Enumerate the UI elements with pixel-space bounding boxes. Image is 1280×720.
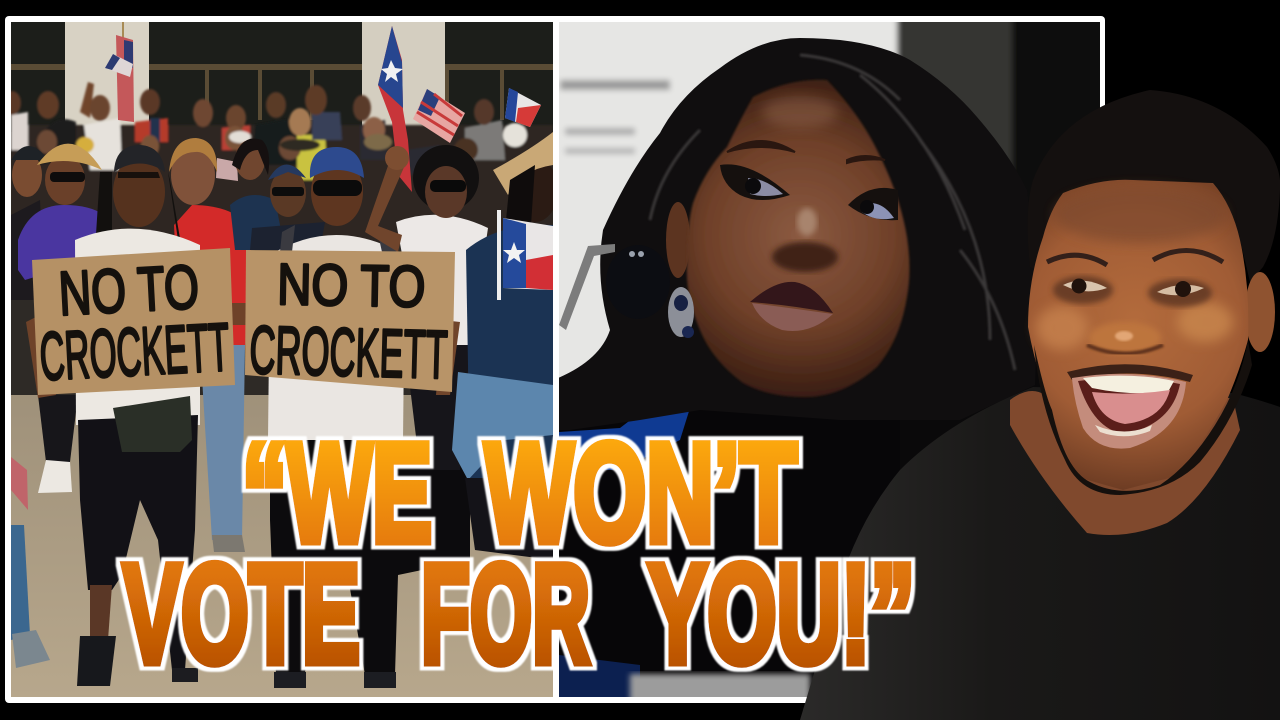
protest sign left: CROCKETT: [38, 309, 232, 395]
building facade: [11, 22, 553, 127]
ground: [11, 395, 553, 697]
dark shirt women: [230, 138, 325, 250]
left eye: [1063, 278, 1107, 294]
protest sign right: CROCKETT: [249, 312, 449, 393]
hair highlights: [650, 55, 1015, 370]
red shirt woman: [169, 138, 252, 552]
protest sign right: [245, 250, 455, 393]
arms holding signs: [26, 303, 460, 398]
title word: VOTE: VOTE: [123, 535, 360, 692]
man reacting: [800, 90, 1280, 720]
title word: WE with quote: “WE: [242, 414, 432, 571]
face: [1028, 180, 1248, 490]
lips: [750, 282, 833, 331]
woman with sunglasses centre: [268, 147, 470, 688]
hair: [1028, 90, 1280, 282]
protest sign left: [32, 248, 235, 395]
earring: [668, 287, 694, 338]
far left woman in hat: [11, 144, 106, 493]
woman with braids and cap: [75, 145, 200, 686]
far right woman in hat: [452, 132, 558, 560]
panel: protest photo: [3, 22, 558, 697]
title word: FOR: FOR: [421, 535, 590, 692]
back crowd: [11, 80, 553, 182]
left eye: [720, 164, 790, 200]
woman right with raised arm: [365, 145, 488, 470]
title word: WON'T: WON’T: [485, 414, 797, 571]
clothing: [559, 412, 814, 697]
black t-shirt: [800, 387, 1280, 720]
ear: [666, 202, 690, 278]
beard: [1034, 340, 1252, 495]
front Texas flag: [497, 210, 553, 300]
protest sign right: NO TO: [277, 252, 426, 320]
right eye: [848, 188, 898, 220]
forehead shade: [1055, 187, 1225, 243]
protesters: [11, 132, 558, 688]
protest sign left: NO TO: [57, 253, 201, 329]
nose: [772, 208, 838, 272]
eyebrows: [727, 141, 795, 152]
right eye: [1157, 281, 1204, 297]
hair: [558, 38, 1036, 430]
blurred backdrop: [559, 22, 1016, 378]
microphone: [559, 244, 644, 330]
forehead highlight: [762, 96, 838, 128]
bottom left legs: [11, 457, 50, 668]
face: [687, 80, 910, 397]
moustache: [1067, 364, 1193, 382]
neck: [1010, 391, 1240, 535]
nose: [1087, 322, 1163, 354]
mouth: [1072, 374, 1186, 449]
flags: [105, 22, 541, 192]
eye shadows: [1053, 276, 1113, 304]
panel: woman portrait: [550, 10, 1112, 704]
brows: [1047, 250, 1223, 265]
ear: [1245, 272, 1275, 352]
title: [123, 414, 915, 692]
cheek highlights: [1036, 306, 1088, 350]
title word: YOU!”: YOU!”: [648, 535, 915, 692]
